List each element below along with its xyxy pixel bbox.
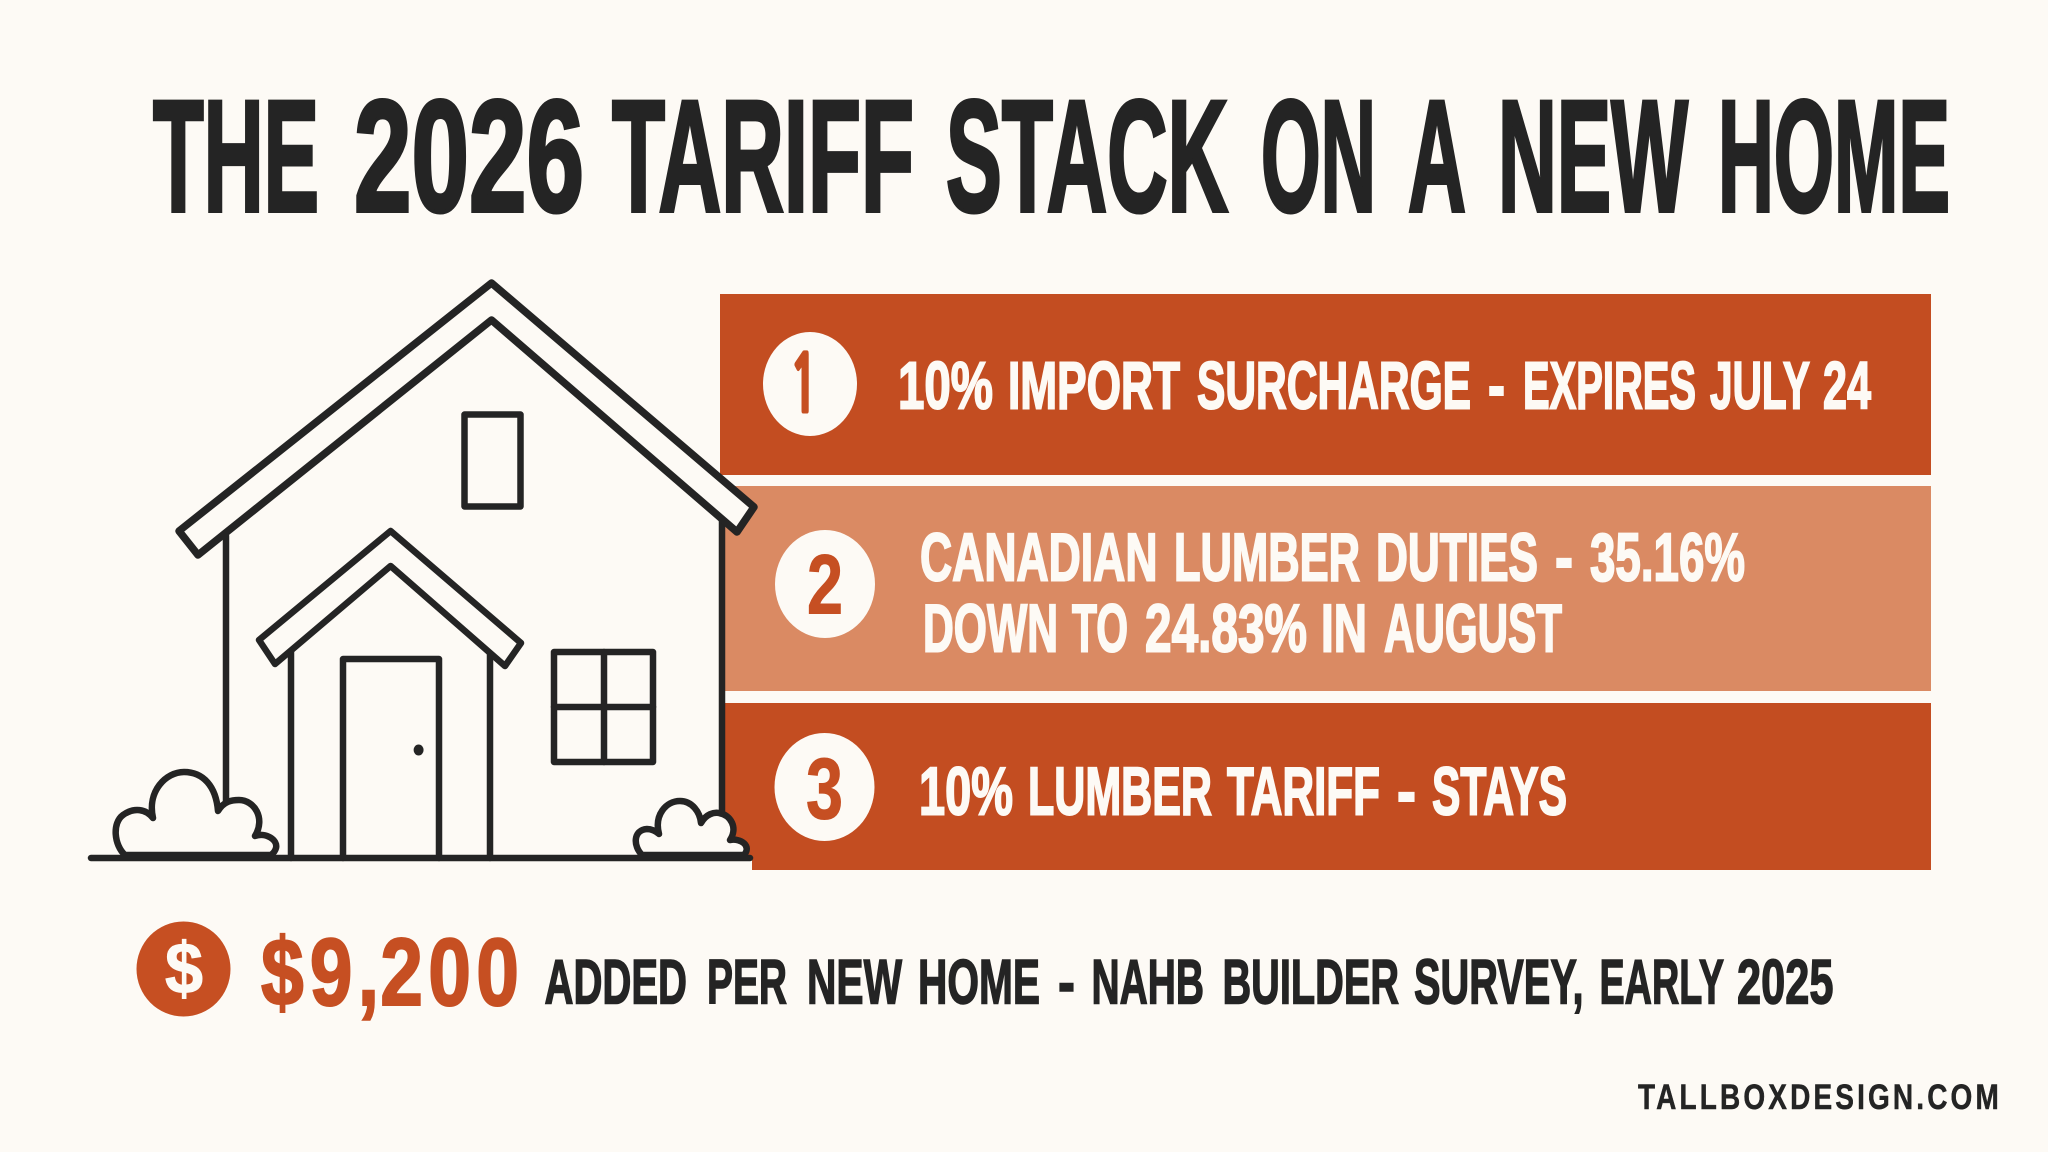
layer 2 label: 35.16% (1590, 520, 1745, 596)
layer 2 label (920, 520, 1745, 666)
number badge 3 (774, 733, 874, 841)
house walls (226, 521, 722, 815)
icon: house line drawing (91, 283, 754, 858)
layer 3 label: LUMBER (1028, 754, 1212, 830)
icon: dollar coin: $ (165, 929, 203, 1009)
porch roof (259, 531, 521, 666)
layer 2 label: LUMBER (1174, 520, 1360, 596)
cost description: - (1058, 948, 1075, 1018)
front door (343, 659, 439, 858)
title: ON (1261, 67, 1376, 245)
layer 1 label: 24 (1823, 348, 1871, 424)
layer 1 label (898, 348, 1871, 424)
porch walls (291, 652, 490, 858)
layer 1 label: - (1488, 348, 1505, 424)
layer 1 label: SURCHARGE (1197, 348, 1471, 424)
right bush (636, 801, 747, 855)
layer 3 label: STAYS (1432, 754, 1567, 830)
layer 1 label: 10% (898, 348, 993, 424)
layer 2 label: TO (1072, 590, 1128, 666)
layer 2 label: AUGUST (1384, 590, 1562, 666)
title (153, 67, 1950, 245)
title: NEW (1498, 67, 1688, 245)
layer 2 label: IN (1321, 590, 1367, 666)
layer 1 label: JULY (1710, 348, 1810, 424)
icon: dollar coin (136, 922, 230, 1016)
number badge 2 (775, 530, 875, 638)
title: TARIFF (612, 67, 914, 245)
title: STACK (946, 67, 1228, 245)
layer 1 label: EXPIRES (1523, 348, 1696, 424)
panel: stack layer 2 (722, 486, 1931, 691)
source credit: TALLBOXDESIGN.COM (1638, 1077, 1999, 1117)
panel: stack layer 1 (720, 294, 1931, 475)
number badge 2: 2 (807, 538, 843, 632)
cost figure: $9,200 (261, 919, 519, 1026)
cost description: NEW (807, 948, 902, 1018)
cost description: ADDED (544, 948, 687, 1018)
layer 3 label (919, 754, 1567, 830)
title: A (1408, 67, 1466, 245)
layer 3 label: 10% (919, 754, 1013, 830)
panel: stack layer 3 (722, 703, 1931, 870)
ground line (91, 855, 750, 861)
layer 3 label: TARIFF (1227, 754, 1380, 830)
callout: cost per home (136, 919, 1834, 1026)
number badge 1 (763, 332, 857, 436)
layer 2 label: DOWN (923, 590, 1058, 666)
layer 2 label: CANADIAN (920, 520, 1158, 596)
main roof (179, 283, 754, 555)
layer 2 label: DUTIES (1376, 520, 1538, 596)
cost description: EARLY (1600, 948, 1724, 1018)
left bush (116, 772, 276, 855)
number badge 1: 1 (789, 346, 819, 424)
four-pane window (554, 652, 653, 762)
cost description: HOME (918, 948, 1040, 1018)
cost description: NAHB (1092, 948, 1204, 1018)
layer 2 label: - (1555, 520, 1573, 596)
number badge 3: 3 (806, 742, 843, 838)
cost description: BUILDER (1222, 948, 1399, 1018)
layer 2 label: 24.83% (1145, 590, 1307, 666)
layer 3 label: - (1397, 754, 1416, 830)
cost description: 2025 (1737, 948, 1834, 1018)
layer 1 label: IMPORT (1008, 348, 1180, 424)
gable window (464, 414, 520, 506)
cost description (544, 948, 1834, 1018)
title: THE (153, 67, 319, 245)
title: 2026 (354, 67, 584, 245)
cost description: PER (707, 948, 787, 1018)
cost description: SURVEY, (1414, 948, 1584, 1018)
